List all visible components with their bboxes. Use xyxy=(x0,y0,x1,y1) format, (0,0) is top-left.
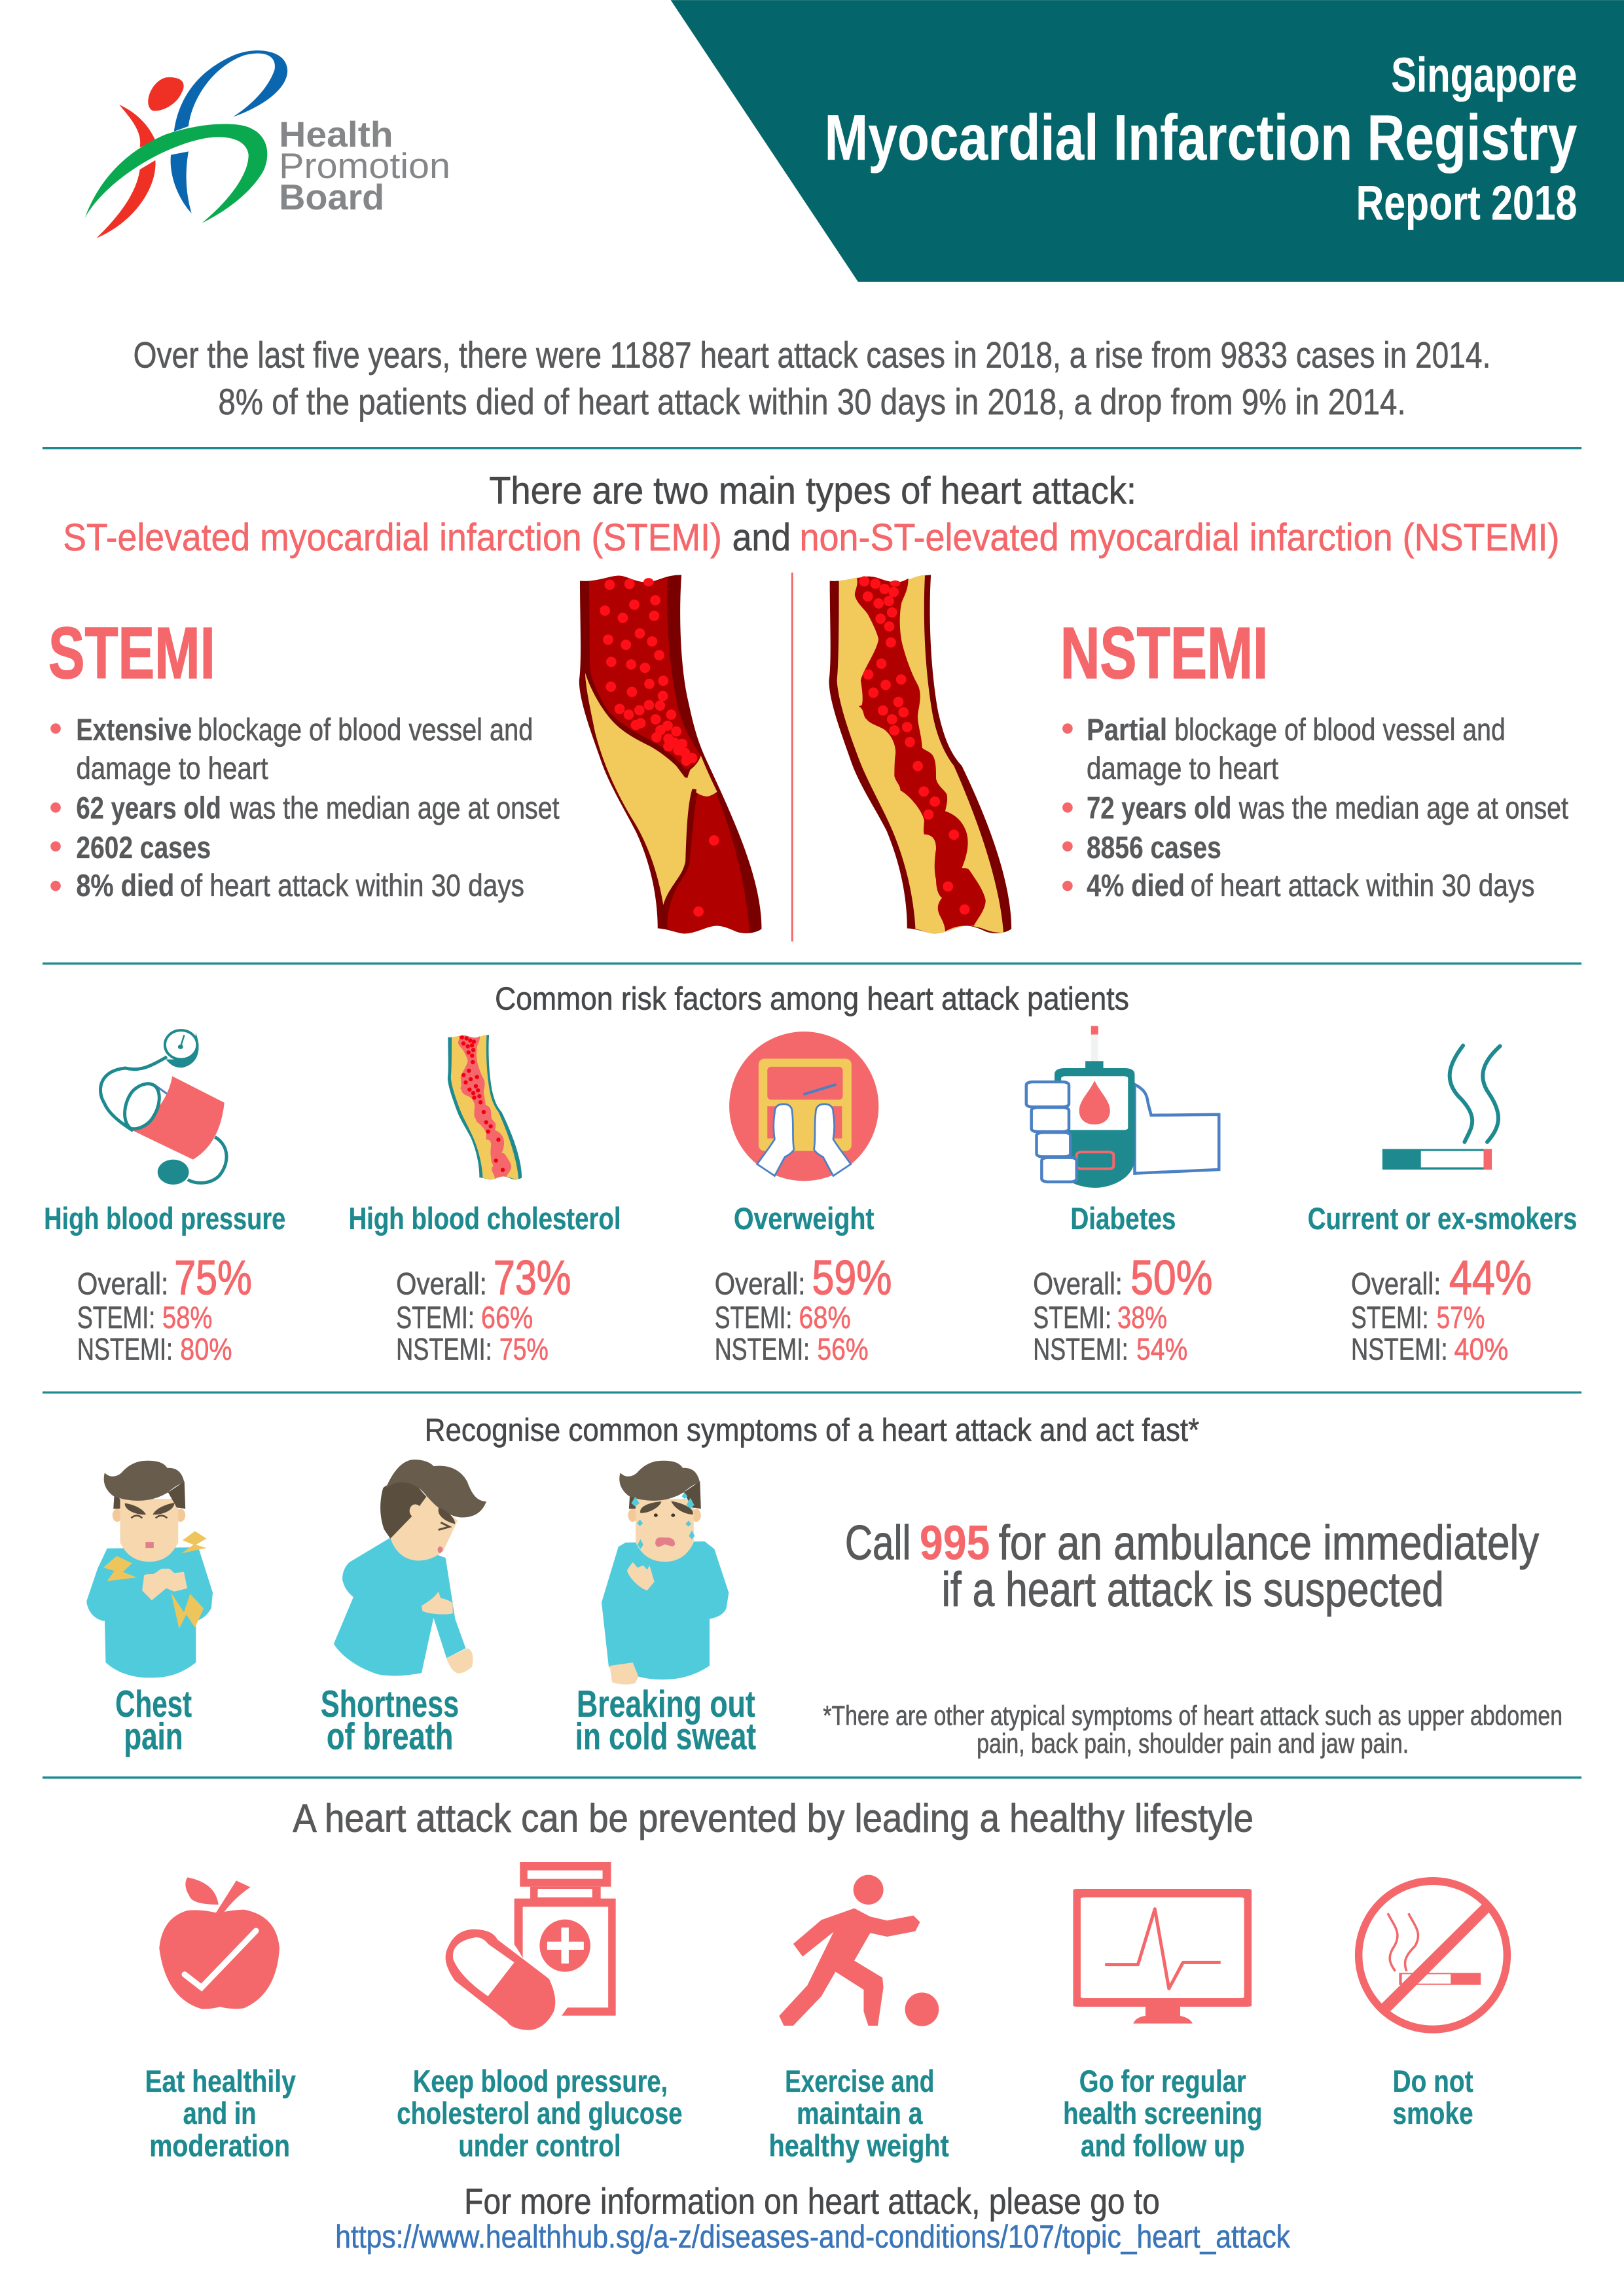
heading: prevention: A heart attack can be prevented by leading a healthy lifestyle xyxy=(293,1796,1254,1840)
label: health screening: health screening xyxy=(1063,2096,1262,2130)
heading: two main types: non-ST-elevated myocardial infarction (NSTEMI) xyxy=(799,516,1560,559)
risk factor: diabetes: Diabetes xyxy=(1070,1201,1176,1236)
footer: more information: https://www.healthhub.sg/a-z/diseases-and-conditions/107/topic_heart_attack xyxy=(335,2219,1290,2255)
risk factor: high blood pressure: 80% xyxy=(180,1331,232,1366)
label: cold sweat: in cold sweat xyxy=(575,1715,756,1757)
callout: call 995: 995 xyxy=(920,1516,990,1570)
risk factor: high blood cholesterol: STEMI: xyxy=(396,1300,475,1335)
bullet list: NSTEMI facts: of heart attack within 30 days xyxy=(1191,868,1535,903)
label: cold sweat: Breaking out xyxy=(577,1683,755,1725)
illustration: NSTEMI artery xyxy=(829,575,1011,933)
bullet list: STEMI facts: 2602 cases xyxy=(76,830,211,865)
icon: cigarette with smoke xyxy=(1382,1046,1500,1170)
icon: no smoking xyxy=(1355,1877,1511,2034)
heading: two main types: and xyxy=(732,516,791,559)
risk factor: high blood pressure xyxy=(44,1201,285,1366)
logo: Health Promotion Board xyxy=(85,50,450,238)
icon: blood pressure cuff xyxy=(100,1030,226,1185)
label: cold sweat xyxy=(575,1683,756,1757)
figure: cold sweat xyxy=(602,1461,729,1685)
risk factor: high blood cholesterol xyxy=(348,1201,621,1366)
risk factor: high blood pressure: Overall: xyxy=(77,1266,168,1301)
icon: mini artery xyxy=(448,1035,522,1179)
logo text: Promotion xyxy=(279,145,450,186)
footnote: atypical symptoms xyxy=(823,1700,1562,1759)
label: do not smoke xyxy=(1393,2064,1473,2130)
title: Singapore xyxy=(1391,48,1577,102)
bullet list: STEMI facts: was the median age at onset xyxy=(229,791,560,825)
risk factor: high blood pressure: 58% xyxy=(162,1300,212,1335)
heading: risk factors: Common risk factors among heart attack patients xyxy=(495,981,1129,1017)
icon: exercise figure xyxy=(779,1875,939,2026)
label: shortness of breath: Shortness xyxy=(321,1683,459,1725)
risk factor: diabetes: 38% xyxy=(1117,1300,1167,1335)
risk factor: overweight xyxy=(715,1201,892,1366)
label: keep under control: under control xyxy=(458,2128,621,2162)
footnote: atypical symptoms: pain, back pain, shoulder pain and jaw pain. xyxy=(977,1729,1409,1759)
icon: glucose meter in hand xyxy=(1026,1026,1219,1188)
intro text xyxy=(134,334,1490,422)
risk factor: overweight: 59% xyxy=(812,1251,892,1305)
risk factor: high blood cholesterol: 66% xyxy=(481,1300,533,1335)
risk factor: current or ex-smokers: 40% xyxy=(1454,1331,1508,1366)
figure: chest pain xyxy=(86,1461,213,1677)
risk factor: overweight: 68% xyxy=(799,1300,851,1335)
intro text: 8% of the patients died of heart attack within 30 days in 2018, a drop from 9% in 2014. xyxy=(218,381,1406,422)
callout: call 995: for an ambulance immediately xyxy=(999,1516,1539,1570)
panel: NSTEMI xyxy=(1060,612,1568,903)
risk factor: high blood cholesterol: Overall: xyxy=(396,1266,487,1301)
heading: STEMI: STEMI xyxy=(48,612,215,694)
risk factor: high blood pressure: STEMI: xyxy=(77,1300,155,1335)
heading: symptoms: Recognise common symptoms of a heart attack and act fast* xyxy=(425,1412,1199,1448)
risk factor: overweight: NSTEMI: xyxy=(715,1331,810,1366)
figure: shortness of breath xyxy=(334,1460,486,1676)
bullet list: NSTEMI facts xyxy=(1062,712,1568,903)
risk factor: overweight: Overweight xyxy=(734,1201,875,1236)
label: eat healthily: and in xyxy=(183,2096,257,2130)
label: health screening: Go for regular xyxy=(1079,2064,1246,2098)
risk factor: high blood pressure: High blood pressure xyxy=(44,1201,285,1236)
heading: two main types xyxy=(63,470,1560,559)
header banner xyxy=(671,0,1624,282)
label: keep under control: cholesterol and glucose xyxy=(397,2096,683,2130)
bullet list: STEMI facts: damage to heart xyxy=(76,751,268,785)
risk factor: high blood cholesterol: 73% xyxy=(494,1251,571,1305)
callout: call 995: Call xyxy=(845,1516,911,1570)
risk factor: diabetes: 50% xyxy=(1130,1251,1212,1305)
icon: apple xyxy=(159,1877,280,2009)
bullet list: NSTEMI facts: Partial xyxy=(1087,712,1167,747)
risk factor: high blood cholesterol: High blood cholesterol xyxy=(348,1201,621,1236)
title xyxy=(825,48,1578,230)
risk factor: diabetes: NSTEMI: xyxy=(1033,1331,1128,1366)
risk factor: high blood cholesterol: 75% xyxy=(499,1331,549,1366)
bullet list: STEMI facts xyxy=(50,712,560,903)
footer: more information: For more information on heart attack, please go to xyxy=(464,2181,1160,2222)
risk factor: diabetes: 54% xyxy=(1136,1331,1187,1366)
risk factor: high blood pressure: 75% xyxy=(174,1251,252,1305)
bullet list: NSTEMI facts: 8856 cases xyxy=(1087,830,1221,865)
label: eat healthily: Eat healthily xyxy=(145,2064,296,2098)
label: shortness of breath xyxy=(321,1683,459,1757)
label: exercise: healthy weight xyxy=(769,2128,949,2162)
label: chest pain xyxy=(115,1683,192,1757)
footer: more information xyxy=(335,2181,1290,2255)
logo text xyxy=(279,114,450,217)
risk factor: current or ex-smokers: 57% xyxy=(1437,1300,1485,1335)
callout: call 995 xyxy=(845,1516,1539,1617)
bullet list: STEMI facts: Extensive xyxy=(76,712,192,747)
risk factor: overweight: Overall: xyxy=(715,1266,805,1301)
bullet list: NSTEMI facts: blockage of blood vessel and xyxy=(1174,712,1506,747)
risk factor: high blood cholesterol: NSTEMI: xyxy=(396,1331,492,1366)
panel: STEMI xyxy=(48,612,560,903)
risk factor: current or ex-smokers: 44% xyxy=(1449,1251,1532,1305)
label: health screening xyxy=(1063,2064,1262,2162)
label: shortness of breath: of breath xyxy=(327,1715,453,1757)
label: eat healthily xyxy=(145,2064,296,2162)
label: exercise: maintain a xyxy=(797,2096,923,2130)
risk factor: current or ex-smokers xyxy=(1308,1201,1577,1366)
label: health screening: and follow up xyxy=(1081,2128,1245,2162)
risk factor: current or ex-smokers: Overall: xyxy=(1351,1266,1441,1301)
heading: two main types: ST-elevated myocardial infarction (STEMI) xyxy=(63,516,722,559)
label: keep under control: Keep blood pressure, xyxy=(413,2064,668,2098)
risk factor: overweight: STEMI: xyxy=(715,1300,792,1335)
risk factor: diabetes: Overall: xyxy=(1033,1266,1123,1301)
risk factor: current or ex-smokers: NSTEMI: xyxy=(1351,1331,1448,1366)
bullet list: NSTEMI facts: 4% died xyxy=(1087,868,1185,903)
label: exercise xyxy=(769,2064,949,2162)
icon: logo figure xyxy=(85,50,287,238)
label: exercise: Exercise and xyxy=(785,2064,934,2098)
label: eat healthily: moderation xyxy=(149,2128,290,2162)
risk factor: diabetes: STEMI: xyxy=(1033,1300,1111,1335)
icon: weighing scale xyxy=(729,1031,878,1181)
bullet list: STEMI facts: 8% died xyxy=(76,868,174,903)
label: do not smoke: smoke xyxy=(1393,2096,1473,2130)
illustration: STEMI artery xyxy=(579,575,761,933)
bullet list: STEMI facts: 62 years old xyxy=(76,791,221,825)
icon: heart monitor xyxy=(1073,1889,1252,2024)
risk factor: current or ex-smokers: STEMI: xyxy=(1351,1300,1429,1335)
heading: two main types: There are two main types of heart attack: xyxy=(489,470,1136,512)
bullet list: STEMI facts: of heart attack within 30 days xyxy=(180,868,524,903)
bullet list: NSTEMI facts: was the median age at onset xyxy=(1238,791,1568,825)
bullet list: NSTEMI facts: 72 years old xyxy=(1087,791,1231,825)
label: do not smoke: Do not xyxy=(1393,2064,1473,2098)
label: chest pain: Chest xyxy=(115,1683,192,1725)
heading: NSTEMI: NSTEMI xyxy=(1060,612,1268,694)
logo text: Health xyxy=(279,114,393,154)
risk factor: high blood pressure: NSTEMI: xyxy=(77,1331,173,1366)
bullet list: NSTEMI facts: damage to heart xyxy=(1087,751,1278,785)
label: chest pain: pain xyxy=(124,1715,183,1757)
logo text: Board xyxy=(279,177,384,217)
label: keep under control xyxy=(397,2064,683,2162)
callout: call 995: if a heart attack is suspected xyxy=(941,1562,1444,1617)
bullet list: STEMI facts: blockage of blood vessel and xyxy=(198,712,533,747)
icon: medicine bottle and pill xyxy=(437,1862,616,2034)
risk factor: diabetes xyxy=(1033,1201,1212,1366)
risk factor: overweight: 56% xyxy=(817,1331,869,1366)
